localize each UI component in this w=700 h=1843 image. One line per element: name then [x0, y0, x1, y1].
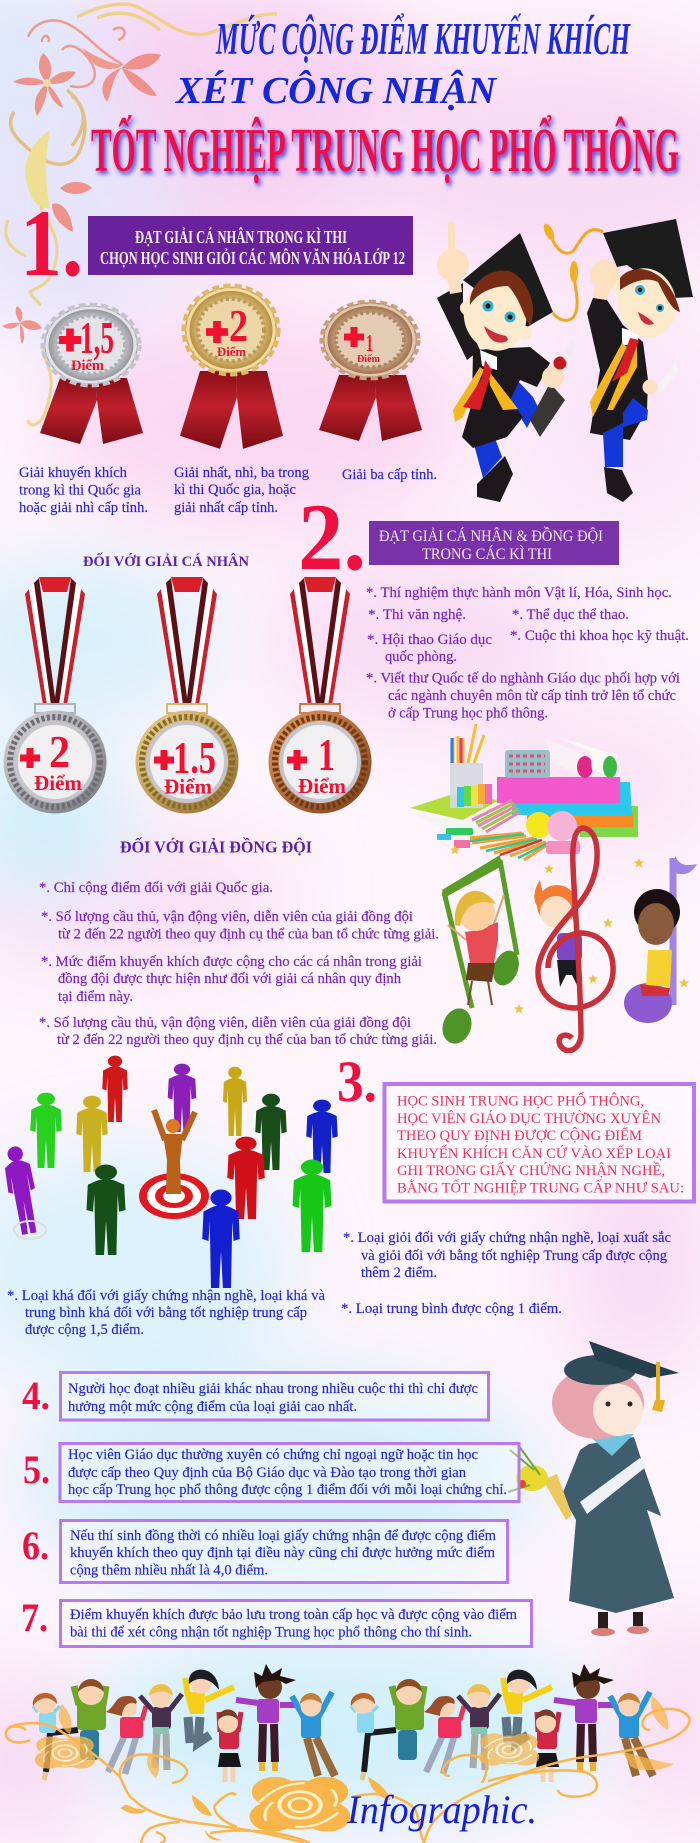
- gold floral ornament bottom: [6, 1696, 690, 1843]
- medal: gold +1.5: [136, 577, 238, 814]
- illustration: graduation tassel: [542, 222, 603, 320]
- medal: gold rosette +2: [180, 287, 283, 449]
- illustration: graduate boy right: [587, 219, 693, 502]
- illustration: bouquet: [508, 1442, 572, 1520]
- section 2 number: 2.: [298, 484, 366, 590]
- rule 4: hưởng một mức cộng điểm của loại giải cao nhất.: [68, 1399, 357, 1415]
- team awards list: từ 2 đến 22 người theo quy định cụ thể của ban tổ chức từng giải.: [58, 926, 439, 942]
- caption: silver rosette: hoặc giải nhì cấp tỉnh.: [19, 500, 148, 516]
- medal: gold rosette +2: 2: [229, 300, 248, 351]
- illustration: purple music note with boy: [624, 856, 697, 1023]
- section 3 callout: KHUYẾN KHÍCH CĂN CỨ VÀO XẾP LOẠI: [397, 1145, 671, 1162]
- team awards list: *. Chỉ cộng điểm đối với giải Quốc gia.: [39, 880, 273, 896]
- rule 5: [23, 1444, 519, 1502]
- title line 2: XÉT CÔNG NHẬN: [175, 69, 498, 112]
- section 3 callout: HỌC VIÊN GIÁO DỤC THƯỜNG XUYÊN: [397, 1110, 661, 1127]
- rule 5: được cấp theo Quy định của Bộ Giáo dục và Đào tạo trong thời gian: [68, 1465, 467, 1481]
- medal: silver +2: Điểm: [34, 771, 82, 795]
- medal: silver +2: [4, 577, 106, 814]
- section 2 list: *. Cuộc thi khoa học kỹ thuật.: [510, 628, 689, 644]
- section 2 list: *. Thể dục thể thao.: [512, 607, 629, 623]
- section 3 list left: trung bình khá đối với bằng tốt nghiệp trung cấp: [25, 1305, 307, 1321]
- section 2 list: *. Viết thư Quốc tế do nghành Giáo dục phối hợp với: [366, 670, 680, 686]
- section 3 callout: HỌC SINH TRUNG HỌC PHỔ THÔNG,: [397, 1092, 644, 1110]
- section 3 callout: BẰNG TỐT NGHIỆP TRUNG CẤP NHƯ SAU:: [397, 1178, 684, 1196]
- section 2 list: *. Thí nghiệm thực hành môn Vật lí, Hóa, Sinh học.: [366, 585, 672, 601]
- rule 4: 4.: [22, 1373, 50, 1418]
- team awards list: đồng đội được thực hiện như đối với giải cá nhân quy định: [58, 971, 401, 987]
- rule 4: Người học đoạt nhiều giải khác nhau trong nhiều cuộc thi thì chỉ được: [68, 1381, 478, 1397]
- decorative stars: [514, 858, 689, 1014]
- medal: silver rosette +1,5: 1,5: [80, 312, 114, 363]
- medal: bronze +1: [268, 577, 372, 814]
- rule 6: cộng thêm nhiều nhất là 4,0 điểm.: [70, 1562, 268, 1578]
- heading: individual awards: ĐỐI VỚI GIẢI CÁ NHÂN: [83, 552, 250, 570]
- caption: silver rosette: trong kì thi Quốc gia: [19, 482, 142, 498]
- section 3 callout: [384, 1084, 694, 1202]
- section 3 list right: *. Loại giỏi đối với giấy chứng nhận nghề, loại xuất sắc: [343, 1230, 671, 1246]
- team awards list: tại điểm này.: [58, 989, 133, 1005]
- rule 5: học cấp Trung học phổ thông được cộng 1 điểm đối với mỗi loại chứng chỉ.: [68, 1482, 507, 1498]
- medal: gold +1.5: Điểm: [164, 774, 212, 798]
- section 2 list: quốc phòng.: [385, 649, 457, 665]
- rule 5: Học viên Giáo dục thường xuyên có chứng chỉ ngoại ngữ hoặc tin học: [68, 1447, 478, 1463]
- medal: silver rosette +1,5: [40, 306, 143, 444]
- section 3 callout: THEO QUY ĐỊNH ĐƯỢC CỘNG ĐIỂM: [397, 1126, 642, 1144]
- medal: gold +1.5: 1.5: [173, 733, 216, 783]
- section 2 heading: [369, 521, 619, 565]
- illustration: graduate boy left: [437, 222, 576, 502]
- medal: bronze +1: Điểm: [298, 774, 346, 798]
- caption: bronze rosette: Giải ba cấp tỉnh.: [342, 467, 437, 483]
- section 1 heading: [88, 216, 413, 275]
- caption: gold rosette: Giải nhất, nhì, ba trong: [174, 465, 309, 481]
- section 1 heading: CHỌN HỌC SINH GIỎI CÁC MÔN VĂN HÓA LỚP 12: [100, 247, 405, 268]
- section 3 list right: [341, 1230, 671, 1317]
- heading: team awards: ĐỐI VỚI GIẢI ĐỒNG ĐỘI: [120, 836, 312, 856]
- floral ornament top left: [2, 4, 277, 425]
- section 1 heading: ĐẠT GIẢI CÁ NHÂN TRONG KÌ THI: [135, 226, 347, 247]
- rule 7: bài thi để xét công nhận tốt nghiệp Trung học phổ thông cho thí sinh.: [70, 1624, 472, 1640]
- medal: bronze rosette +1: 1: [366, 331, 373, 357]
- rule 6: Nếu thí sinh đồng thời có nhiều loại giấy chứng nhận để được cộng điểm: [70, 1528, 497, 1544]
- caption: gold rosette: [174, 465, 309, 516]
- caption: gold rosette: giải nhất cấp tỉnh.: [174, 500, 278, 516]
- team awards list: *. Số lượng cầu thủ, vận động viên, diễn viên của giải đồng đội: [41, 909, 413, 925]
- section 3 list right: thêm 2 điểm.: [361, 1265, 437, 1281]
- section 2 list: ở cấp Trung học phổ thông.: [388, 706, 548, 722]
- section 3 list left: được cộng 1,5 điểm.: [25, 1322, 144, 1338]
- section 2 heading: ĐẠT GIẢI CÁ NHÂN & ĐỒNG ĐỘI: [379, 527, 603, 545]
- medal: silver rosette +1,5: Điểm: [71, 358, 104, 374]
- rule 6: 6.: [22, 1523, 49, 1568]
- team awards list: từ 2 đến 22 người theo quy định cụ thể của ban tổ chức từng giải.: [57, 1032, 437, 1048]
- illustration: school supplies: [410, 724, 638, 860]
- rule 6: [22, 1520, 508, 1582]
- section 3 list left: *. Loại khá đối với giấy chứng nhận nghề, loại khá và: [7, 1288, 326, 1304]
- section 2 list: *. Hội thao Giáo dục: [367, 632, 492, 648]
- rule 5: 5.: [23, 1447, 50, 1492]
- team awards list: [39, 880, 439, 1048]
- section 2 list: các ngành chuyên môn từ cấp tỉnh trở lên tổ chức: [388, 688, 676, 704]
- row of children right group: [351, 1664, 653, 1782]
- medal: bronze rosette +1: [319, 302, 422, 441]
- section 3 list left: [7, 1288, 326, 1338]
- medal: gold rosette +2: Điểm: [217, 344, 246, 359]
- section 2 heading: TRONG CÁC KÌ THI: [422, 546, 552, 563]
- rule 7: Điểm khuyến khích được bảo lưu trong toàn cấp học và được cộng vào điểm: [70, 1607, 518, 1623]
- rule 7: 7.: [21, 1595, 48, 1640]
- illustration: crowd of figures around a target: [1, 1056, 338, 1288]
- illustration: graduate girl with bouquet: [552, 1341, 679, 1636]
- team awards list: *. Số lượng cầu thủ, vận động viên, diễn viên của giải đồng đội: [39, 1015, 411, 1031]
- medal: bronze rosette +1: Điểm: [357, 353, 380, 365]
- caption: silver rosette: Giải khuyến khích: [19, 465, 128, 481]
- section 3 callout: GHI TRONG GIẤY CHỨNG NHẬN NGHỀ,: [397, 1162, 665, 1179]
- rule 6: khuyến khích theo quy định tại điều này cũng chỉ được hưởng mức điểm: [70, 1545, 496, 1561]
- footer label: Infographic.: [346, 1787, 537, 1832]
- team awards list: *. Mức điểm khuyến khích được cộng cho các cá nhân trong giải: [41, 954, 422, 970]
- row of children left group: [33, 1664, 335, 1782]
- section 2 list: [366, 585, 689, 722]
- section 3 list right: và giỏi đối với bằng tốt nghiệp Trung cấp được cộng: [361, 1248, 667, 1264]
- medal: silver +2: 2: [49, 727, 70, 777]
- section 3 list right: *. Loại trung bình được cộng 1 điểm.: [341, 1301, 562, 1317]
- medal: bronze +1: 1: [318, 730, 335, 780]
- illustration: red treble clef with girl: [534, 828, 613, 1051]
- illustration: green music note with child: [438, 855, 523, 1048]
- caption: gold rosette: kì thi Quốc gia, hoặc: [174, 482, 296, 498]
- section 2 list: *. Thi văn nghệ.: [368, 607, 466, 623]
- section 3 number: 3.: [337, 1049, 377, 1114]
- rule 4: [22, 1372, 488, 1420]
- section 1 number: 1.: [20, 190, 83, 296]
- caption: silver rosette: [19, 465, 148, 516]
- rule 7: [21, 1595, 532, 1646]
